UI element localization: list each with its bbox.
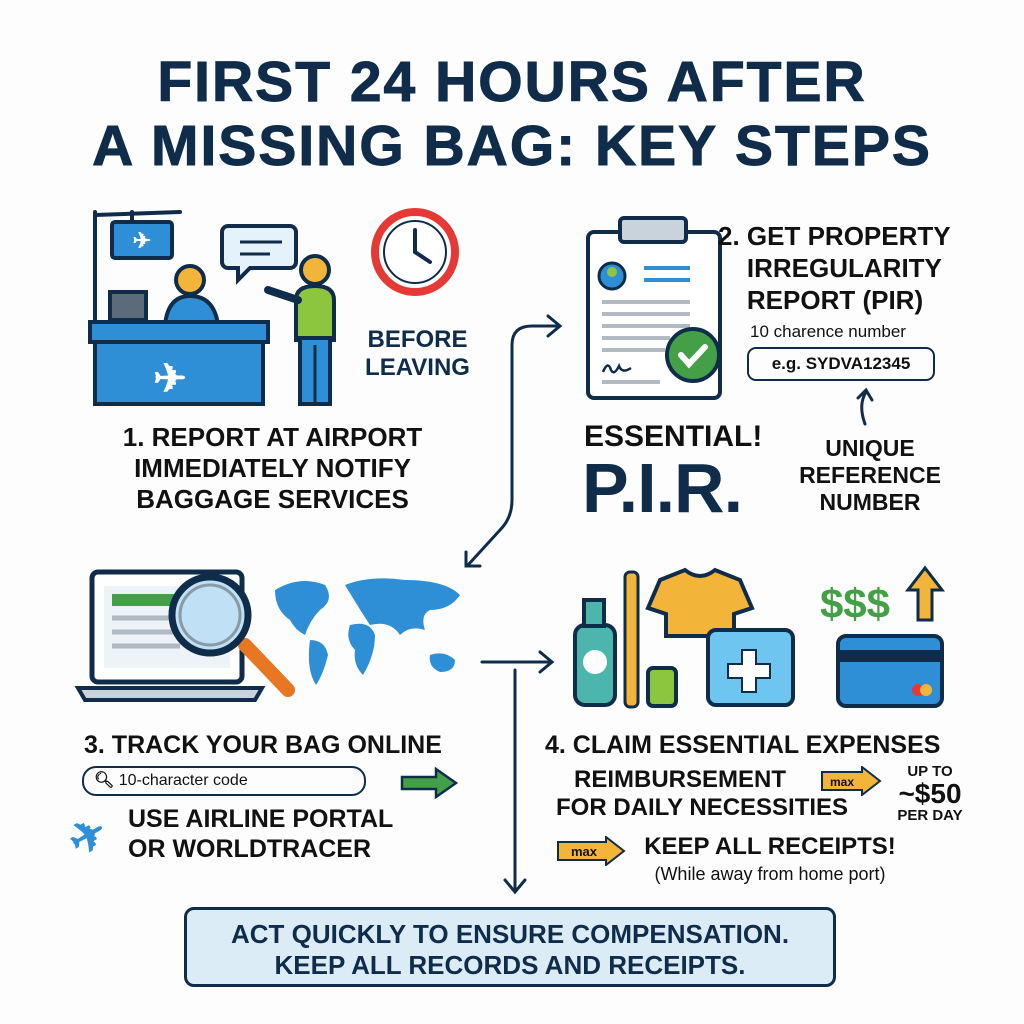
- step 2 heading: 2. GET PROPERTY: [718, 221, 951, 251]
- step 4 text: REIMBURSEMENT: [574, 766, 786, 793]
- step 3 heading: 3. TRACK YOUR BAG ONLINE: [84, 731, 442, 759]
- receipts text: KEEP ALL RECEIPTS!: [644, 833, 896, 860]
- before leaving label: LEAVING: [365, 354, 470, 381]
- max arrow 1: [821, 766, 882, 796]
- step 2 heading: [718, 221, 951, 315]
- callout: bottom summary: [184, 907, 836, 987]
- step 4 text: [556, 766, 848, 821]
- receipts text: (While away from home port): [654, 864, 886, 884]
- receipts text: [644, 833, 896, 884]
- step 3 text: OR WORLDTRACER: [128, 835, 371, 863]
- step 1 text: 1. REPORT AT AIRPORT: [123, 422, 422, 452]
- search box: [82, 766, 366, 796]
- arrow: green: [400, 766, 458, 800]
- panel 4 illustration: essentials, money, card: [573, 566, 945, 708]
- max arrow 1: max: [830, 775, 854, 789]
- step 1 text: IMMEDIATELY NOTIFY: [134, 453, 411, 483]
- unique reference label: NUMBER: [820, 489, 920, 515]
- title: [92, 50, 932, 178]
- step 1 text: [123, 422, 422, 514]
- step 3 text: [128, 805, 393, 863]
- reference example box: [747, 347, 935, 381]
- max arrow 2: [557, 836, 626, 866]
- amount: [897, 763, 963, 824]
- panel 1 illustration: airport desk: ✈: [133, 228, 151, 253]
- reference number note: 10 charence number: [750, 322, 906, 341]
- unique reference label: REFERENCE: [799, 462, 941, 488]
- unique reference label: UNIQUE: [825, 435, 915, 461]
- step 1 text: BAGGAGE SERVICES: [136, 484, 409, 514]
- essential PIR: ESSENTIAL!: [584, 420, 762, 453]
- search box: 🔍︎ 10-character code: [94, 772, 248, 789]
- max arrow 2: max: [571, 844, 598, 859]
- step 3 text: USE AIRLINE PORTAL: [128, 805, 393, 833]
- icon: plane: ✈: [60, 806, 116, 867]
- amount: UP TO: [907, 763, 953, 780]
- before leaving label: BEFORE: [367, 326, 468, 353]
- title: A MISSING BAG: KEY STEPS: [92, 114, 932, 178]
- reference example box: e.g. SYDVA12345: [772, 354, 910, 373]
- panel 4 illustration: essentials, money, card: $$$: [820, 580, 890, 627]
- title: FIRST 24 HOURS AFTER: [157, 50, 867, 114]
- step 4 text: FOR DAILY NECESSITIES: [556, 794, 848, 821]
- unique reference label: [799, 435, 941, 515]
- before leaving label: [365, 326, 470, 381]
- step 2 heading: IRREGULARITY: [747, 253, 942, 283]
- callout: bottom summary: KEEP ALL RECORDS AND RECEIPTS.: [275, 950, 745, 980]
- step 4 heading: 4. CLAIM ESSENTIAL EXPENSES: [545, 731, 940, 759]
- step 2 heading: REPORT (PIR): [747, 285, 923, 315]
- amount: PER DAY: [897, 807, 963, 824]
- panel 2 illustration: PIR clipboard: [586, 216, 722, 400]
- panel 1 illustration: airport desk: [88, 208, 459, 406]
- icon: clock: [375, 212, 455, 292]
- amount: ~$50: [898, 778, 962, 809]
- callout: bottom summary: ACT QUICKLY TO ENSURE COMPENSATION.: [231, 919, 789, 949]
- panel 1 illustration: airport desk: ✈: [153, 357, 187, 401]
- text: P.I.R.: [582, 449, 742, 527]
- panel 3 illustration: laptop and world map: [74, 570, 460, 702]
